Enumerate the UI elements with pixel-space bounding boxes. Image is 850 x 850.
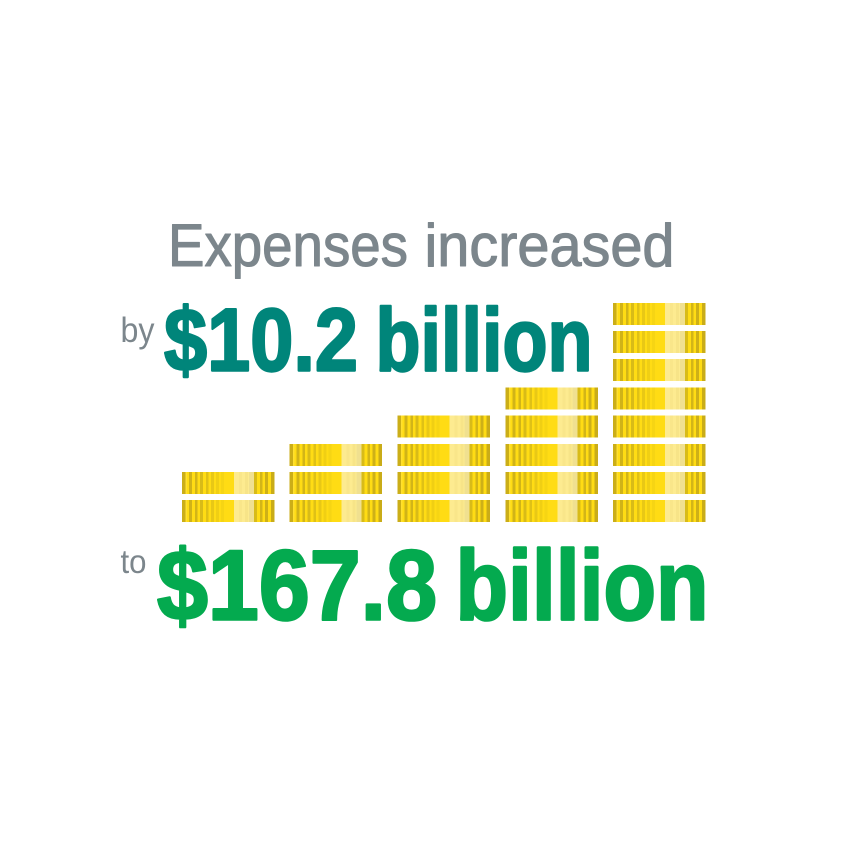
coin stack 2 xyxy=(290,444,382,522)
coin stack 5 xyxy=(613,303,706,522)
label: by: by xyxy=(120,311,155,350)
label: to: to xyxy=(120,543,146,580)
figure: $167.8 billion: $167.8 xyxy=(157,530,437,640)
figure: $10.2 billion: billion xyxy=(376,290,592,390)
figure: $167.8 billion xyxy=(157,530,708,640)
coin stack 1 xyxy=(182,472,274,522)
figure: $10.2 billion: $10.2 xyxy=(164,290,358,390)
figure: $10.2 billion xyxy=(164,290,592,390)
coin stack 4 xyxy=(506,388,598,522)
title: Expenses increased: increased xyxy=(424,212,674,279)
title: Expenses increased: Expenses xyxy=(168,212,408,279)
coin chart: five rising stacks xyxy=(182,303,706,522)
coin stack 3 xyxy=(398,416,490,522)
figure: $167.8 billion: billion xyxy=(456,530,708,640)
title: Expenses increased xyxy=(168,212,674,279)
